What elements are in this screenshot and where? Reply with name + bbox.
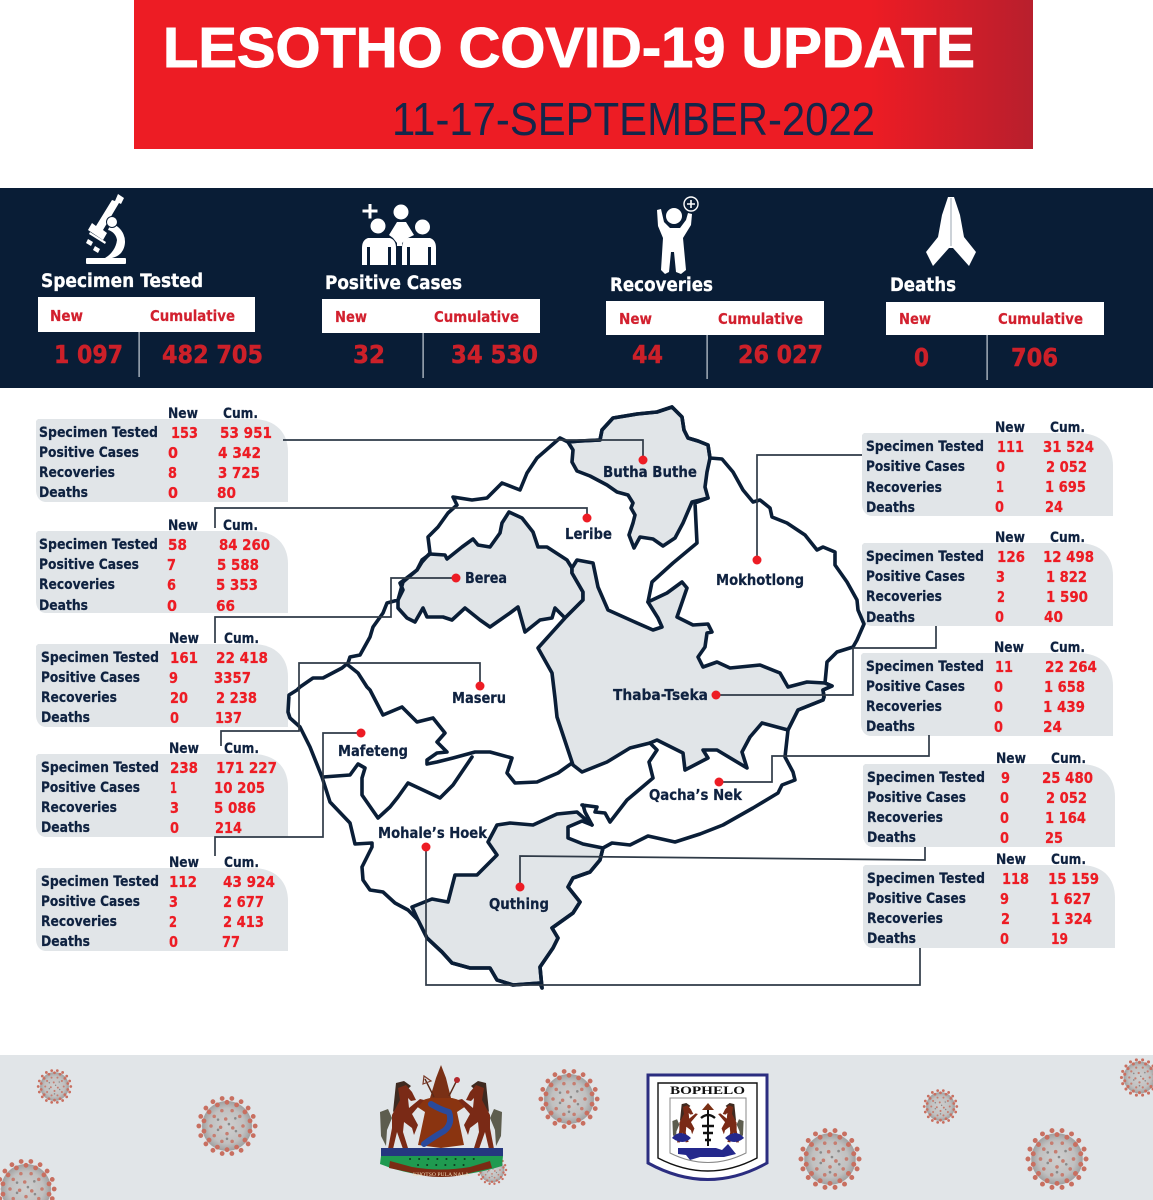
marker and label: Berea	[452, 569, 507, 587]
panel: Thaba-Tseka district stats	[862, 530, 1113, 626]
footer band	[0, 1055, 1153, 1200]
panel: Qacha's Nek district stats: 0	[994, 718, 1003, 736]
panel: Mohale's Hoek district stats: 0	[1000, 930, 1009, 948]
panel: Mohale's Hoek district stats: Recoveries	[867, 911, 943, 927]
panel: Qacha's Nek district stats: 22 264	[1045, 658, 1097, 676]
panel: Leribe district stats: Specimen Tested	[39, 537, 158, 553]
panel: Mohale's Hoek district stats: Positive Cases	[867, 891, 966, 907]
panel: Leribe district stats: Positive Cases	[39, 557, 139, 573]
panel: Mohale's Hoek district stats: 9	[1000, 890, 1009, 908]
icon: virus	[1121, 1060, 1153, 1095]
stat: recoveries: New	[619, 310, 652, 328]
stat: deaths	[886, 197, 1104, 380]
icon: person with raised arms	[657, 197, 698, 274]
marker and label: Mokhotlong	[716, 556, 804, 589]
panel: Maseru district stats: 0	[170, 819, 179, 837]
panel: Maseru district stats: 3	[170, 799, 179, 817]
stat: positive cases: 34 530	[451, 340, 538, 369]
panel: Berea district stats: 9	[169, 669, 178, 687]
panel: Maseru district stats: 238	[170, 759, 198, 777]
icon: virus	[0, 1161, 54, 1200]
panel: Mokhotlong district stats: Cum.	[1050, 420, 1085, 436]
panel: Mokhotlong district stats: Deaths	[866, 500, 915, 516]
panel: Mafeteng district stats: 77	[222, 933, 240, 951]
connector: Butha Buthe	[283, 440, 643, 459]
panel: Leribe district stats: Deaths	[39, 598, 88, 614]
icon: virus	[38, 1071, 71, 1102]
column header box	[38, 297, 255, 332]
header banner	[134, 0, 1033, 149]
column header box	[322, 299, 540, 333]
panel: Berea district stats: Positive Cases	[41, 670, 140, 686]
panel: Butha Buthe district stats: 80	[217, 484, 236, 502]
panel: Mohale's Hoek district stats: Deaths	[867, 931, 916, 947]
panel: Mokhotlong district stats: Positive Cases	[866, 459, 965, 475]
connector: Thaba-Tseka	[716, 626, 936, 695]
panel: Berea district stats	[36, 631, 288, 727]
panel: Quthing district stats: New	[996, 751, 1026, 767]
panel: Thaba-Tseka district stats: 12 498	[1043, 548, 1094, 566]
panel: Qacha's Nek district stats: New	[994, 640, 1024, 656]
panel: Mohale's Hoek district stats: New	[996, 852, 1026, 868]
panel: Thaba-Tseka district stats: Recoveries	[866, 589, 942, 605]
panel: Quthing district stats: Recoveries	[867, 810, 943, 826]
panel: Quthing district stats: Specimen Tested	[867, 770, 985, 786]
panel: Qacha's Nek district stats: Cum.	[1050, 640, 1085, 656]
panel: Butha Buthe district stats	[36, 406, 288, 502]
marker and label: Mohale's Hoek: Mohale’s Hoek	[378, 824, 488, 842]
panel: Mafeteng district stats: 112	[169, 873, 197, 891]
marker and label: Maseru	[452, 682, 506, 707]
marker and label: Thaba-Tseka: Thaba-Tseka	[613, 686, 708, 704]
date range: 11-17-SEPTEMBER-2022	[392, 93, 875, 145]
panel: Leribe district stats: 5 588	[217, 556, 259, 574]
panel: Butha Buthe district stats: 0	[168, 484, 178, 502]
coat of arms of Lesotho	[380, 1065, 503, 1178]
panel: Mafeteng district stats: Recoveries	[41, 914, 117, 930]
panel: Berea district stats: 20	[170, 689, 188, 707]
panel: Mokhotlong district stats: 24	[1045, 498, 1063, 516]
marker and label: Maseru: Maseru	[452, 689, 506, 707]
panel: Mafeteng district stats: 2 677	[223, 893, 264, 911]
panel: Qacha's Nek district stats: 24	[1043, 718, 1062, 736]
panel: Butha Buthe district stats: Positive Cases	[39, 445, 139, 461]
panel: Mohale's Hoek district stats: 15 159	[1048, 870, 1099, 888]
panel: Maseru district stats: New	[169, 741, 199, 757]
panel: Qacha's Nek district stats: 0	[994, 678, 1003, 696]
values: 0	[914, 343, 929, 372]
values: 1 097	[54, 340, 123, 369]
panel: Mohale's Hoek district stats	[863, 852, 1115, 948]
stat: specimen tested	[38, 194, 263, 377]
icon: praying hands	[926, 197, 976, 266]
panel: Mafeteng district stats: 2 413	[223, 913, 264, 931]
national summary band	[0, 188, 1153, 388]
panel: Maseru district stats: 214	[215, 819, 242, 837]
icon: virus	[1028, 1131, 1086, 1187]
panel: Leribe district stats: 58	[168, 536, 187, 554]
panel: Berea district stats: Cum.	[224, 631, 259, 647]
marker and label: Quthing	[489, 882, 549, 913]
stat: specimen tested: New	[50, 307, 83, 325]
panel: Thaba-Tseka district stats: 2	[997, 588, 1005, 606]
panel: Mohale's Hoek district stats: 19	[1051, 930, 1068, 948]
connector: Maseru	[221, 663, 480, 746]
panel: Butha Buthe district stats: 3 725	[218, 464, 260, 482]
district: Butha Buthe	[568, 407, 710, 548]
panel: Berea district stats: 0	[170, 709, 179, 727]
stat: recoveries: 26 027	[738, 340, 823, 369]
panel: Berea district stats: New	[169, 631, 199, 647]
panel: Mohale's Hoek district stats: Cum.	[1051, 852, 1086, 868]
panel: Butha Buthe district stats: 0	[168, 444, 178, 462]
icon: virus	[801, 1131, 859, 1187]
panel: Leribe district stats: Cum.	[223, 518, 258, 534]
panel: Mohale's Hoek district stats: 1 627	[1050, 890, 1091, 908]
panel: Quthing district stats: 25	[1045, 829, 1063, 847]
panel: Berea district stats: 137	[215, 709, 242, 727]
panel: Mohale's Hoek district stats: Specimen Tested	[867, 871, 985, 887]
panel: Leribe district stats	[36, 518, 288, 615]
connector: Mohale's Hoek	[426, 847, 920, 985]
panel: Mohale's Hoek district stats: 118	[1002, 870, 1029, 888]
stat: deaths: Cumulative	[998, 310, 1083, 328]
panel: Mokhotlong district stats	[862, 420, 1113, 516]
panel: Mokhotlong district stats: 2 052	[1046, 458, 1087, 476]
panel: Mafeteng district stats: 43 924	[223, 873, 275, 891]
title: LESOTHO COVID-19 UPDATE	[163, 16, 975, 80]
panel: Quthing district stats: 0	[1000, 809, 1009, 827]
panel: Mafeteng district stats: Deaths	[41, 934, 90, 950]
map of Lesotho districts	[288, 407, 864, 988]
panel: Maseru district stats: Deaths	[41, 820, 90, 836]
panel: Quthing district stats: 0	[1000, 829, 1009, 847]
panel: Quthing district stats: 1 164	[1045, 809, 1086, 827]
panel: Qacha's Nek district stats: 0	[994, 698, 1003, 716]
panel: Butha Buthe district stats: Specimen Tested	[39, 425, 158, 441]
stat: positive cases: Cumulative	[434, 308, 519, 326]
connector: Mokhotlong	[757, 455, 862, 560]
panel: Mokhotlong district stats: 0	[996, 458, 1005, 476]
panel: Maseru district stats: 171 227	[216, 759, 277, 777]
column header box	[886, 302, 1104, 335]
panel: Leribe district stats: New	[168, 518, 198, 534]
panel: Qacha's Nek district stats: Recoveries	[866, 699, 942, 715]
panel: Qacha's Nek district stats: 1 658	[1044, 678, 1085, 696]
stat: deaths: New	[899, 310, 931, 328]
marker and label: Berea: Berea	[465, 569, 507, 587]
panel: Berea district stats: 3357	[214, 669, 251, 687]
panel: Mokhotlong district stats: 1	[996, 478, 1004, 496]
panel: Mokhotlong district stats: Recoveries	[866, 480, 942, 496]
panel: Butha Buthe district stats: 153	[171, 424, 198, 442]
panel: Maseru district stats: 5 086	[214, 799, 256, 817]
icon: virus	[478, 1156, 506, 1184]
panel: Quthing district stats: Deaths	[867, 830, 916, 846]
panel: Leribe district stats: 6	[167, 576, 176, 594]
stat: recoveries	[606, 197, 824, 379]
panel: Mokhotlong district stats: 31 524	[1043, 438, 1094, 456]
connector: Leribe	[215, 508, 587, 528]
panel: Berea district stats: 161	[170, 649, 198, 667]
marker and label: Butha Buthe	[603, 456, 697, 481]
panel: Thaba-Tseka district stats: 126	[997, 548, 1025, 566]
stat: specimen tested: Cumulative	[150, 307, 235, 325]
panel: Mafeteng district stats: Positive Cases	[41, 894, 140, 910]
icon: virus	[924, 1091, 957, 1122]
column header box	[606, 301, 824, 335]
panel: Berea district stats: 2 238	[216, 689, 257, 707]
heading: Specimen Tested	[41, 271, 203, 292]
panel: Thaba-Tseka district stats: New	[995, 530, 1025, 546]
heading: Deaths	[890, 275, 956, 296]
panel: Butha Buthe district stats: Recoveries	[39, 465, 115, 481]
panel: Mohale's Hoek district stats: 1 324	[1051, 910, 1092, 928]
marker and label: Mafeteng	[338, 728, 408, 760]
panel: Qacha's Nek district stats	[861, 640, 1113, 736]
Ministry of Health shield: BOPHELO	[670, 1083, 745, 1097]
marker and label: Mafeteng: Mafeteng	[338, 742, 408, 760]
values: 32	[353, 340, 385, 369]
panel: Leribe district stats: 66	[216, 597, 235, 615]
panel: Thaba-Tseka district stats: 1 590	[1046, 588, 1088, 606]
connector: Mafeteng	[215, 733, 361, 856]
panel: Mokhotlong district stats: 111	[997, 438, 1024, 456]
panel: Quthing district stats: 2 052	[1046, 789, 1087, 807]
panel: Butha Buthe district stats: Cum.	[223, 406, 258, 422]
panel: Berea district stats: Deaths	[41, 710, 90, 726]
district: Quthing	[412, 812, 603, 988]
icon: virus	[541, 1071, 597, 1127]
panel: Leribe district stats: Recoveries	[39, 577, 115, 593]
panel: Maseru district stats: Cum.	[224, 741, 259, 757]
panel: Thaba-Tseka district stats: Positive Cases	[866, 569, 965, 585]
panel: Quthing district stats	[863, 751, 1115, 847]
marker and label: Leribe	[565, 514, 612, 543]
icon: microscope	[86, 194, 126, 264]
panel: Quthing district stats: 25 480	[1042, 769, 1093, 787]
connector: Qacha's Nek	[719, 735, 929, 782]
panel: Maseru district stats: 10 205	[214, 779, 265, 797]
heading: Recoveries	[610, 275, 713, 296]
panel: Berea district stats: Recoveries	[41, 690, 117, 706]
heading: Positive Cases	[325, 273, 462, 294]
stat: specimen tested: 482 705	[162, 340, 263, 369]
panel: Butha Buthe district stats: 53 951	[220, 424, 272, 442]
panel: Mokhotlong district stats: 0	[995, 498, 1004, 516]
panel: Leribe district stats: 0	[167, 597, 177, 615]
district: Thaba-Tseka	[538, 560, 832, 772]
connector: Quthing	[520, 847, 925, 887]
panel: Berea district stats: Specimen Tested	[41, 650, 159, 666]
panel: Quthing district stats: Positive Cases	[867, 790, 966, 806]
panel: Maseru district stats: Recoveries	[41, 800, 117, 816]
panel: Maseru district stats: Positive Cases	[41, 780, 140, 796]
panel: Thaba-Tseka district stats: 0	[995, 608, 1004, 626]
panel: Mafeteng district stats: 3	[169, 893, 178, 911]
panel: Thaba-Tseka district stats: Deaths	[866, 610, 915, 626]
stat: positive cases: New	[335, 308, 367, 326]
icon: people with plus	[362, 204, 436, 265]
panel: Maseru district stats: 1	[170, 779, 177, 797]
panel: Mafeteng district stats	[36, 855, 288, 951]
marker and label: Qacha's Nek	[649, 778, 743, 804]
panel: Maseru district stats: Specimen Tested	[41, 760, 159, 776]
panel: Mafeteng district stats: Specimen Tested	[41, 874, 159, 890]
panel: Qacha's Nek district stats: Specimen Tested	[866, 659, 984, 675]
marker and label: Quthing: Quthing	[489, 895, 549, 913]
panel: Quthing district stats: 9	[1001, 769, 1010, 787]
connector: Berea	[215, 578, 456, 643]
panel: Thaba-Tseka district stats: 3	[996, 568, 1005, 586]
panel: Mafeteng district stats: 2	[169, 913, 177, 931]
marker and label: Mohale's Hoek	[378, 824, 488, 852]
panel: Mafeteng district stats: New	[169, 855, 199, 871]
district borders	[323, 498, 708, 825]
panel: Mokhotlong district stats: 1 695	[1045, 478, 1086, 496]
panel: Mokhotlong district stats: Specimen Tested	[866, 439, 984, 455]
panel: Quthing district stats: 0	[1000, 789, 1009, 807]
stat: deaths: 706	[1011, 343, 1058, 372]
panel: Berea district stats: 22 418	[216, 649, 268, 667]
panel: Qacha's Nek district stats: Deaths	[866, 719, 915, 735]
panel: Qacha's Nek district stats: 11	[995, 658, 1013, 676]
icon: virus	[199, 1098, 255, 1154]
panel: Thaba-Tseka district stats: Specimen Tested	[866, 549, 984, 565]
national border	[288, 407, 864, 988]
panel: Quthing district stats: Cum.	[1051, 751, 1086, 767]
marker and label: Qacha's Nek: Qacha’s Nek	[649, 786, 743, 804]
marker and label: Mokhotlong: Mokhotlong	[716, 571, 804, 589]
stat: positive cases	[322, 204, 540, 378]
panel: Mafeteng district stats: 0	[169, 933, 178, 951]
panel: Butha Buthe district stats: 8	[168, 464, 177, 482]
panel: Mokhotlong district stats: New	[995, 420, 1025, 436]
Ministry of Health shield	[648, 1075, 767, 1180]
panel: Mafeteng district stats: Cum.	[224, 855, 259, 871]
stat: recoveries: Cumulative	[718, 310, 803, 328]
marker and label: Leribe: Leribe	[565, 525, 612, 543]
panel: Thaba-Tseka district stats: Cum.	[1050, 530, 1085, 546]
coat of arms of Lesotho: KHOTSO PULA NALA	[413, 1173, 469, 1178]
panel: Thaba-Tseka district stats: 40	[1044, 608, 1063, 626]
panel: Maseru district stats	[36, 741, 288, 837]
panel: Leribe district stats: 7	[167, 556, 176, 574]
district: Berea	[398, 512, 583, 632]
panel: Qacha's Nek district stats: Positive Cases	[866, 679, 965, 695]
panel: Leribe district stats: 5 353	[216, 576, 258, 594]
panel: Thaba-Tseka district stats: 1 822	[1046, 568, 1087, 586]
marker and label: Butha Buthe: Butha Buthe	[603, 463, 697, 481]
panel: Butha Buthe district stats: Deaths	[39, 485, 88, 501]
panel: Leribe district stats: 84 260	[219, 536, 270, 554]
panel: Qacha's Nek district stats: 1 439	[1043, 698, 1085, 716]
panel: Butha Buthe district stats: 4 342	[218, 444, 261, 462]
panel: Butha Buthe district stats: New	[168, 406, 198, 422]
values: 44	[632, 340, 663, 369]
panel: Mohale's Hoek district stats: 2	[1001, 910, 1010, 928]
